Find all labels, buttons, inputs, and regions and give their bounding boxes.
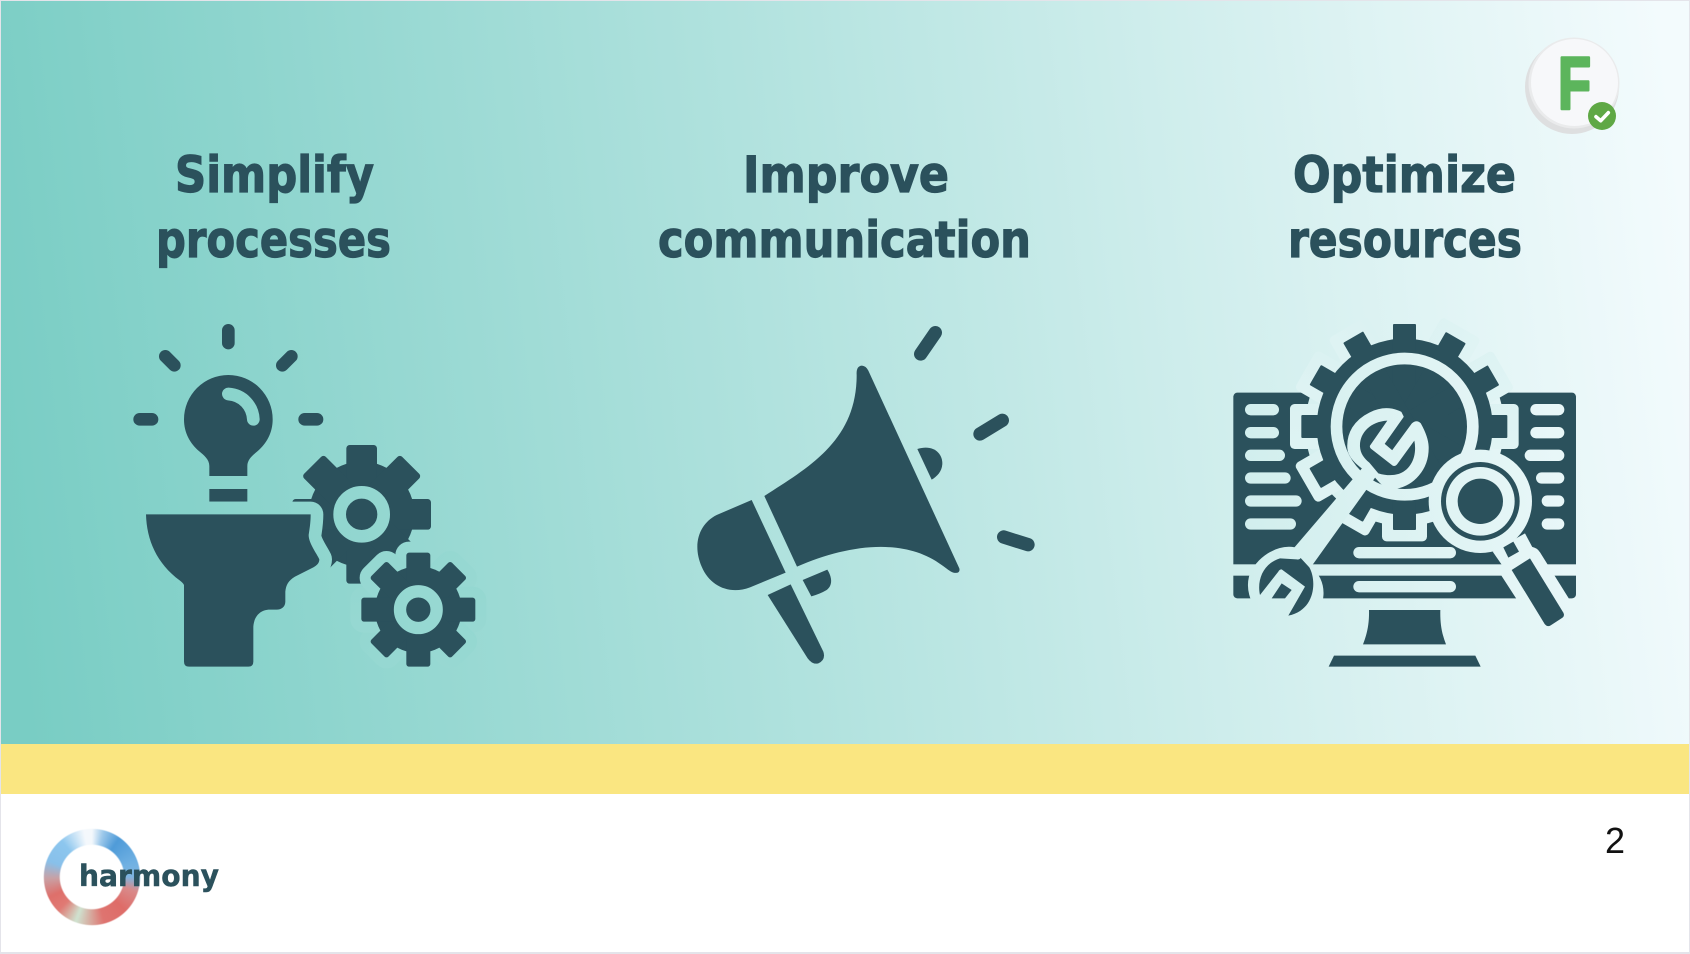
- heading: simplify processes: Simplify: [175, 146, 374, 204]
- megaphone trigger: [803, 570, 831, 596]
- gradient banner: [1, 1, 1689, 744]
- large gear: [292, 445, 431, 584]
- megaphone ear: [917, 448, 942, 480]
- check mark: [1588, 102, 1616, 130]
- heading: improve communication: [658, 146, 1031, 269]
- yellow stripe: [1, 744, 1689, 794]
- gap outlines: [146, 514, 475, 667]
- heading: optimize resources: Optimize: [1293, 146, 1516, 204]
- magnifier: [1429, 450, 1564, 627]
- wrench: [1249, 409, 1428, 620]
- slide page: [1, 794, 1689, 952]
- icon: monitor with gear, wrench, magnifier: [1230, 313, 1580, 667]
- monitor screen: [1233, 393, 1576, 598]
- big gear: [1301, 324, 1507, 530]
- heading: optimize resources: [1288, 146, 1522, 269]
- harmony wordmark: harmony: [79, 859, 219, 893]
- monitor base: [1329, 656, 1481, 667]
- heading: simplify processes: processes: [156, 211, 391, 269]
- badge: F check: [1525, 38, 1620, 134]
- heading: optimize resources: resources: [1288, 211, 1522, 269]
- letter F: F: [1558, 42, 1591, 125]
- funnel: [146, 514, 319, 667]
- icon: megaphone: [697, 333, 1028, 664]
- badge disc: [1525, 38, 1620, 134]
- screen content lines: [1230, 404, 1580, 592]
- bulb rays: [140, 330, 317, 419]
- small gear: [361, 553, 475, 667]
- heading: simplify processes: [156, 146, 391, 269]
- megaphone back: [697, 500, 786, 590]
- heading: improve communication: Improve: [743, 146, 949, 204]
- megaphone handle: [768, 584, 824, 664]
- heading: improve communication: communication: [658, 211, 1031, 269]
- light bulb: [184, 375, 273, 502]
- megaphone horn: [764, 366, 960, 573]
- icon: funnel with light bulb and gears: [140, 330, 475, 667]
- gear outline: [1290, 313, 1519, 541]
- harmony logo ring: [43, 828, 141, 926]
- monitor stand: [1363, 610, 1446, 644]
- page number: 2: [1605, 820, 1625, 861]
- sound rays: [921, 333, 1028, 545]
